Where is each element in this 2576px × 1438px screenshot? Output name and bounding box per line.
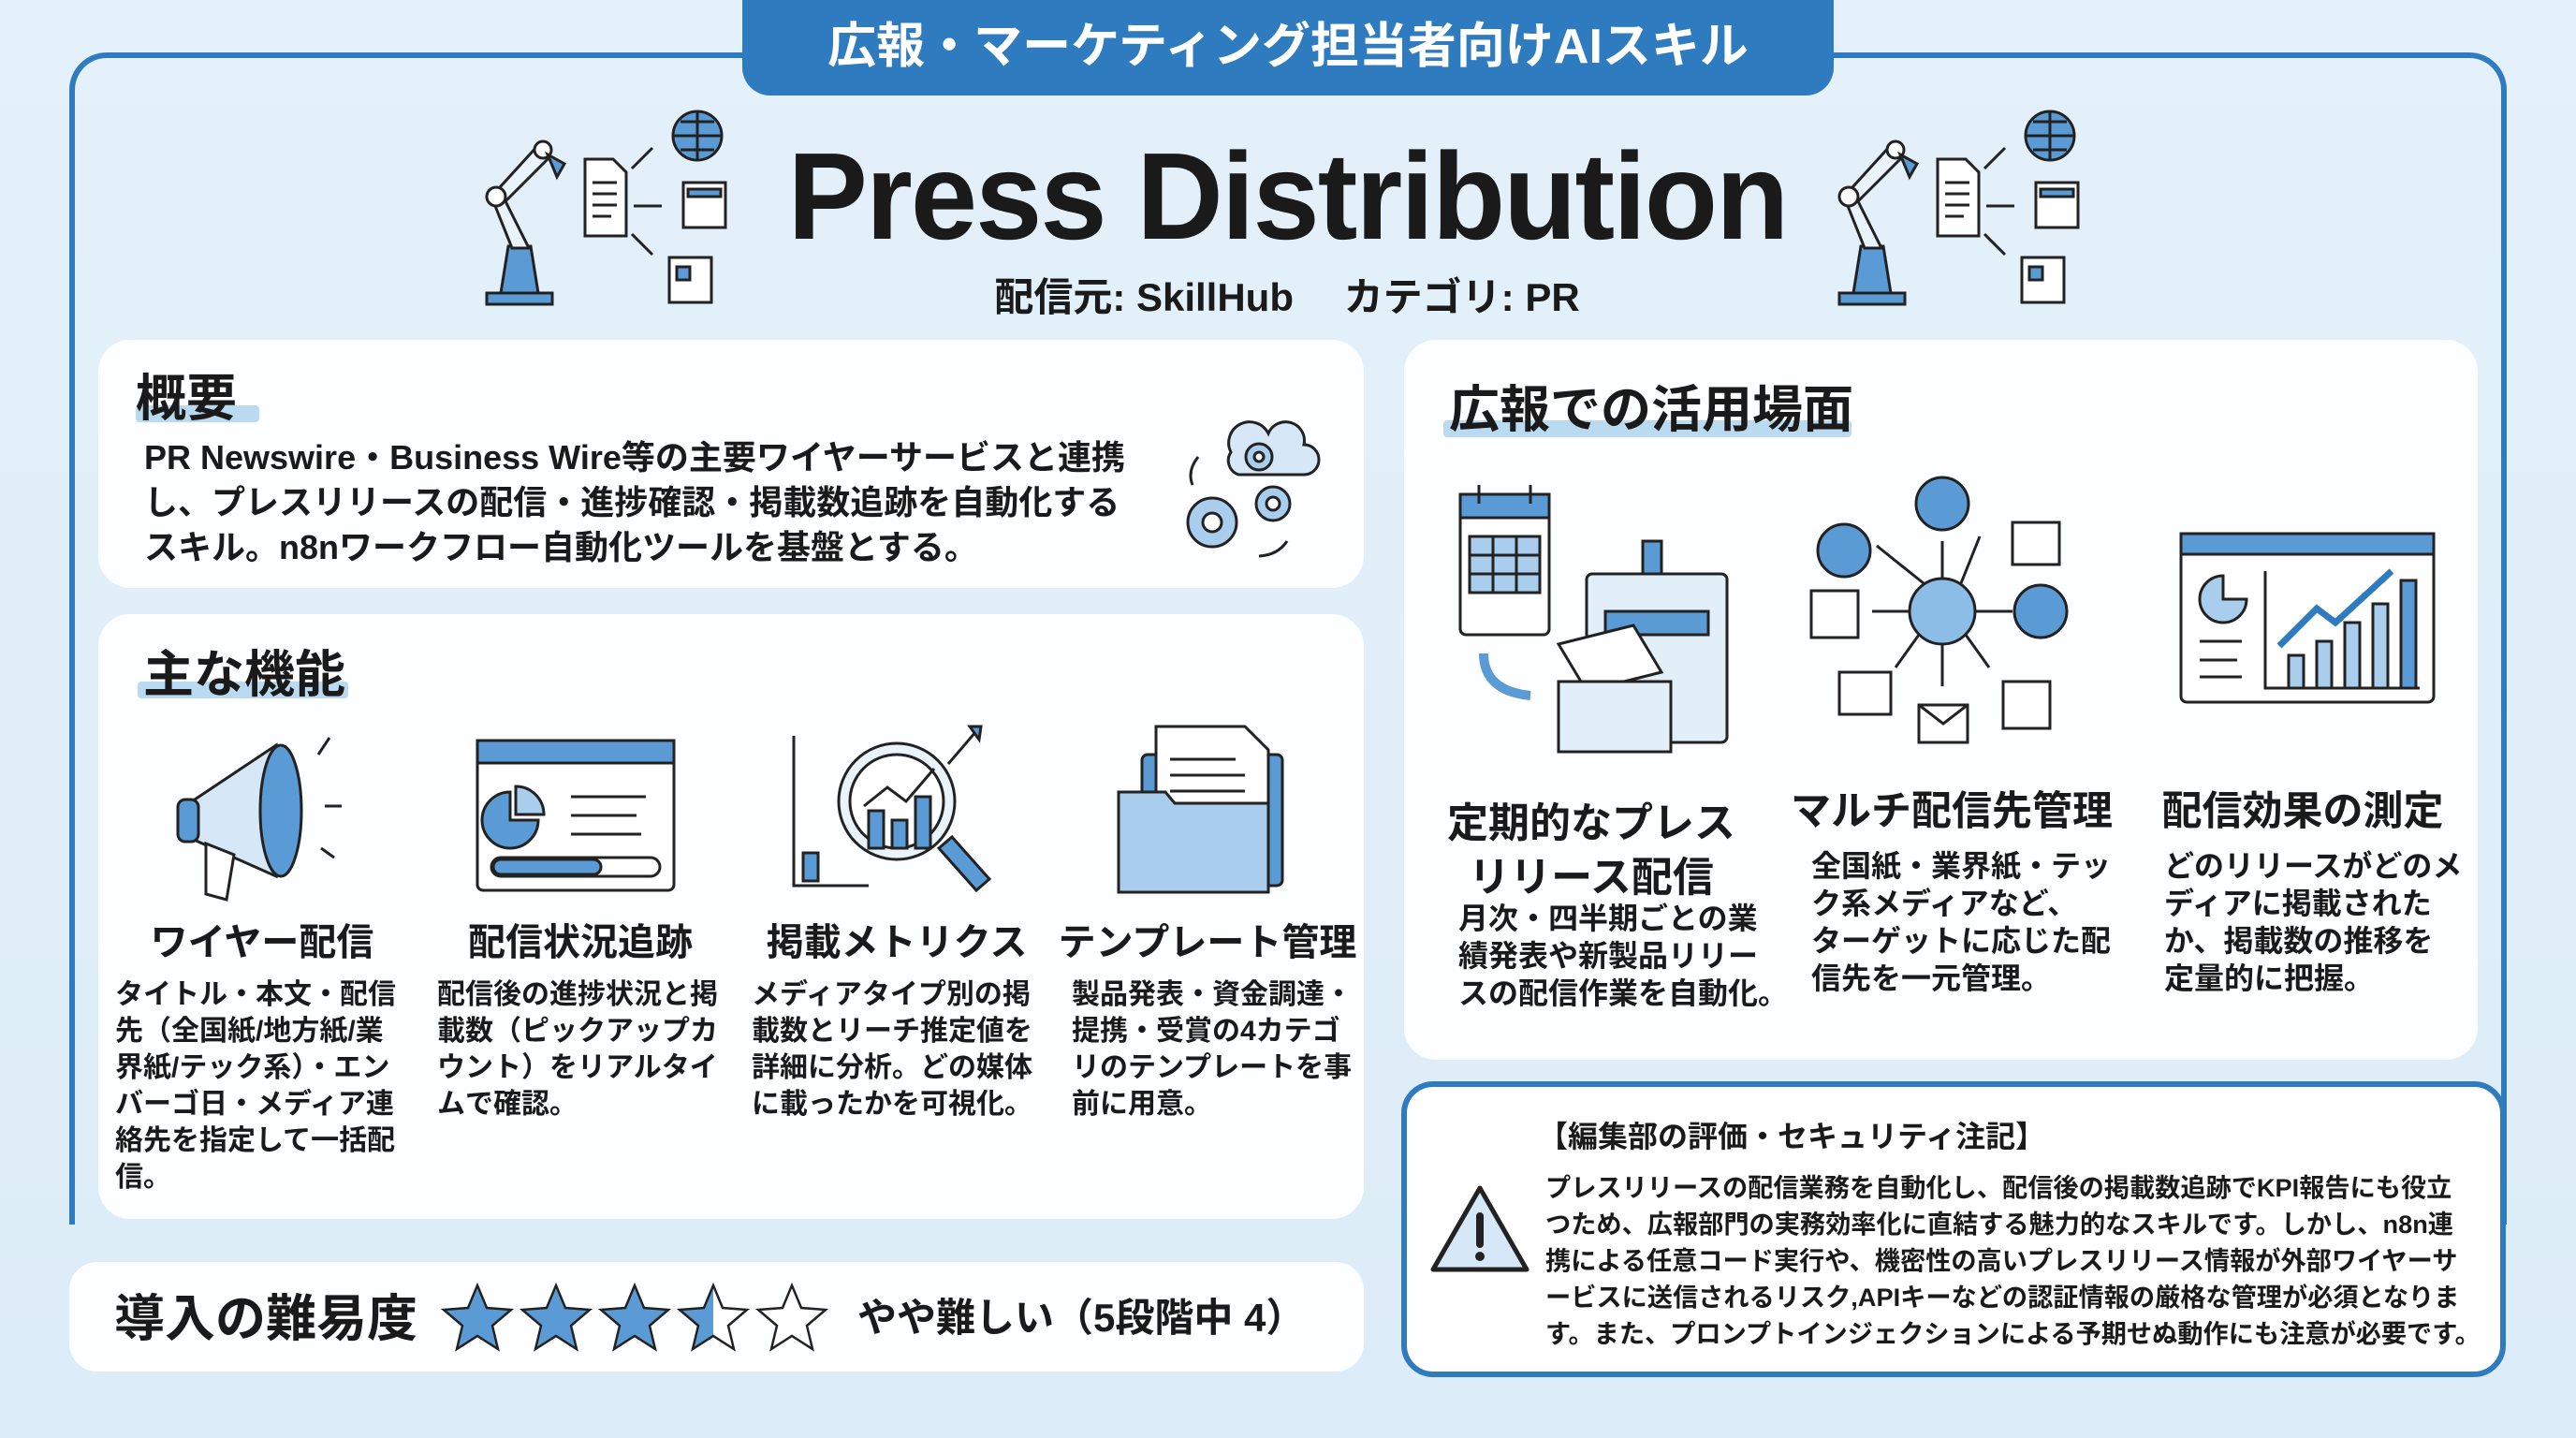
icon: cloud gears	[1187, 420, 1320, 558]
title tab: 広報・マーケティング担当者向けAIスキル	[827, 20, 1749, 74]
callout body: つため、広報部門の実務効率化に直結する魅力的なスキルです。しかし、n8n連	[1545, 1210, 2453, 1239]
use case desc: どのリリースがどのメ	[2164, 849, 2462, 883]
use case desc: 定量的に把握。	[2164, 961, 2374, 995]
icon: robot arm left	[485, 110, 726, 305]
use case title: リリース配信	[1469, 855, 1714, 901]
feature desc: タイトル・本文・配信	[115, 979, 396, 1010]
feature title: テンプレート管理	[1059, 922, 1356, 963]
feature desc: 前に用意。	[1072, 1089, 1212, 1120]
heading: use cases: 広報での活用場面	[1449, 382, 1853, 438]
difficulty label: 導入の難易度	[114, 1291, 417, 1347]
icon: warning triangle	[1430, 1185, 1530, 1271]
title tab	[742, 0, 1834, 95]
use case desc: ターゲットに応じた配	[1811, 924, 2111, 958]
feature: metrics	[752, 725, 1032, 1120]
overview text: PR Newswire・Business Wire等の主要ワイヤーサービスと連携	[144, 438, 1125, 477]
icon: analytics chart	[2179, 532, 2436, 704]
use case desc: ディアに掲載された	[2164, 887, 2432, 920]
use case desc: 全国紙・業界紙・テッ	[1811, 849, 2111, 883]
use case title	[1447, 800, 1735, 901]
overview text: スキル。n8nワークフロー自動化ツールを基盤とする。	[144, 528, 978, 566]
feature title: 配信状況追跡	[468, 922, 693, 963]
feature desc: 先（全国紙/地方紙/業	[115, 1016, 384, 1047]
icon: folder document	[1118, 725, 1284, 893]
outer frame	[69, 52, 2507, 1225]
feature desc: 載数とリーチ推定値を	[752, 1016, 1032, 1047]
feature: wire distribution	[115, 737, 396, 1193]
callout body: 携による任意コード実行や、機密性の高いプレスリリース情報が外部ワイヤーサ	[1545, 1246, 2457, 1275]
feature desc: 絡先を指定して一括配	[115, 1125, 395, 1156]
use case title: マルチ配信先管理	[1791, 789, 2113, 834]
feature desc: ムで確認。	[437, 1089, 578, 1120]
feature desc	[115, 979, 396, 1193]
feature: status tracking	[437, 740, 718, 1120]
use case desc: 月次・四半期ごとの業	[1458, 902, 1758, 935]
use case desc: 信先を一元管理。	[1811, 961, 2051, 995]
feature desc: に載ったかを可視化。	[752, 1089, 1032, 1120]
icon: robot arm right	[1838, 110, 2080, 305]
use case desc: か、掲載数の推移を	[2164, 924, 2433, 958]
icon: magnifier chart	[792, 725, 992, 893]
panel: difficulty	[69, 1262, 1364, 1372]
feature desc: 界紙/テック系）・エン	[115, 1052, 389, 1083]
icon: network	[1810, 476, 2069, 743]
callout body	[1545, 1173, 2481, 1348]
feature desc: リのテンプレートを事	[1072, 1052, 1352, 1083]
callout body: プレスリリースの配信業務を自動化し、配信後の掲載数追跡でKPI報告にも役立	[1545, 1173, 2452, 1202]
feature desc: 載数（ピックアップカ	[437, 1016, 718, 1047]
icon: dashboard	[476, 740, 676, 891]
use case desc	[2164, 849, 2462, 995]
use case desc	[1811, 849, 2111, 995]
feature desc	[1072, 979, 1353, 1120]
heading: overview: 概要	[136, 371, 237, 427]
use case title: 定期的なプレス	[1447, 800, 1735, 846]
use case title: 配信効果の測定	[2162, 789, 2443, 834]
feature desc: ウント）をリアルタイ	[437, 1052, 718, 1083]
feature desc: 提携・受賞の4カテゴ	[1072, 1016, 1340, 1047]
feature desc	[752, 979, 1032, 1120]
icon: calendar printer	[1458, 485, 1728, 753]
subtitle: 配信元: SkillHub カテゴリ: PR	[994, 275, 1580, 319]
callout: editorial security note	[1401, 1081, 2506, 1377]
use case: regular release	[1447, 485, 1788, 1010]
feature desc: 詳細に分析。どの媒体	[752, 1052, 1032, 1083]
difficulty text: やや難しい（5段階中 4）	[857, 1296, 1305, 1340]
panel: overview	[98, 340, 1364, 588]
callout body: ービスに送信されるリスク,APIキーなどの認証情報の厳格な管理が必須となりま	[1545, 1283, 2459, 1312]
feature desc	[437, 979, 718, 1120]
feature desc: メディアタイプ別の掲	[752, 979, 1031, 1010]
use case desc: スの配信作業を自動化。	[1458, 976, 1788, 1010]
callout heading: 【編集部の評価・セキュリティ注記】	[1538, 1120, 2045, 1153]
overview text	[144, 438, 1125, 566]
use case desc: 績発表や新製品リリー	[1458, 939, 1758, 973]
use case desc: ク系メディアなど、	[1811, 887, 2077, 920]
overview text: し、プレスリリースの配信・進捗確認・掲載数追跡を自動化する	[144, 483, 1120, 521]
feature desc: 製品発表・資金調達・	[1072, 979, 1353, 1010]
heading: main features: 主な機能	[143, 647, 345, 703]
feature desc: バーゴ日・メディア連	[115, 1089, 394, 1120]
main title: Press Distribution	[787, 127, 1787, 265]
use case: measurement	[2162, 532, 2462, 995]
use case: multi destination	[1791, 476, 2113, 995]
feature desc: 配信後の進捗状況と掲	[437, 979, 718, 1010]
callout body: す。また、プロンプトインジェクションによる予期せぬ動作にも注意が必要です。	[1545, 1319, 2481, 1348]
feature title: 掲載メトリクス	[767, 922, 1027, 963]
feature desc: 信。	[115, 1162, 171, 1193]
icon: megaphone	[176, 737, 342, 902]
panel: main features	[98, 614, 1364, 1219]
star rating	[441, 1283, 828, 1352]
panel: PR use cases	[1404, 340, 2478, 1060]
feature: template	[1059, 725, 1356, 1120]
feature title: ワイヤー配信	[151, 922, 373, 963]
use case desc	[1458, 902, 1788, 1010]
